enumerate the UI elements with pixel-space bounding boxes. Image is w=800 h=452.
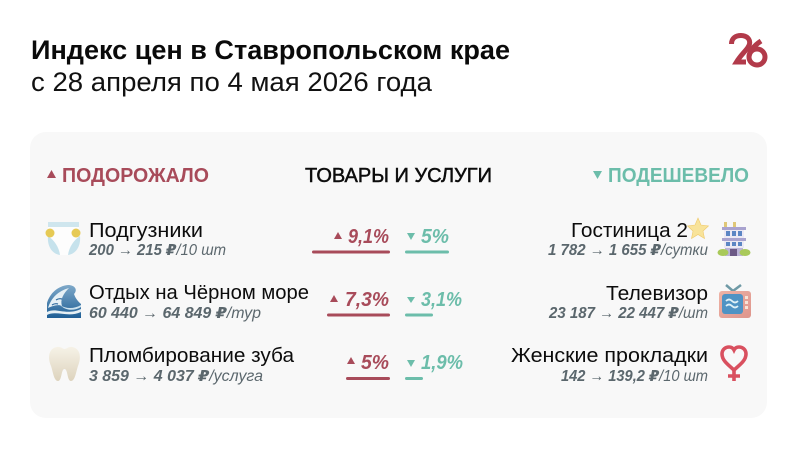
chart: row 2 decrease: 3,1% xyxy=(421,288,462,311)
chart: row 2 increase xyxy=(327,288,390,316)
chart: row 3 decrease: 1,9% xyxy=(421,351,463,374)
chart: row 1 decrease xyxy=(405,225,449,254)
panel: price table xyxy=(30,132,767,418)
row: 2-star hotel xyxy=(548,219,708,259)
row: 2-star hotel: 1 782 → 1 655 ₽/сутки xyxy=(548,242,708,259)
chart: row 1 decrease: 5% xyxy=(421,225,449,248)
row: diapers: 200 → 215 ₽/10 шт xyxy=(88,242,226,259)
row: TV set: Телевизор xyxy=(606,282,708,305)
icon: star xyxy=(688,218,708,238)
heading: goods and services: ТОВАРЫ И УСЛУГИ xyxy=(305,164,492,187)
chart: row 3 increase xyxy=(346,351,390,380)
heading: price decreases: ПОДЕШЕВЕЛО xyxy=(608,164,749,187)
row: dental filling: 3 859 → 4 037 ₽/услуга xyxy=(89,368,263,385)
chart: row 3 increase: 5% xyxy=(361,351,389,374)
row: diapers xyxy=(88,219,226,259)
icon: television xyxy=(719,285,751,318)
chart: row 1 increase: 9,1% xyxy=(348,225,389,248)
row: sanitary pads: 142 → 139,2 ₽/10 шт xyxy=(561,368,708,385)
icon: hotel xyxy=(718,222,750,256)
row: dental filling xyxy=(89,344,295,385)
chart: row 2 increase: 7,3% xyxy=(345,288,389,311)
chart: row 3 decrease xyxy=(405,351,463,380)
subtitle: с 28 апреля по 4 мая 2026 года xyxy=(31,67,432,97)
chart: row 1 increase xyxy=(312,225,390,254)
chart: row 2 decrease xyxy=(405,288,462,316)
heading: price increases: ПОДОРОЖАЛО xyxy=(62,164,209,187)
row: dental filling: Пломбирование зуба xyxy=(89,344,295,367)
row: TV set xyxy=(548,282,708,322)
icon: wave xyxy=(47,285,81,318)
row: Black Sea holiday: 60 440 → 64 849 ₽/тур xyxy=(89,305,261,322)
row: TV set: 23 187 → 22 447 ₽/шт xyxy=(548,305,708,322)
row: Black Sea holiday: Отдых на Чёрном море xyxy=(89,281,309,304)
row: Black Sea holiday xyxy=(89,281,309,322)
row: 2-star hotel: Гостиница 2 xyxy=(571,219,688,242)
row: sanitary pads: Женские прокладки xyxy=(511,344,708,367)
icon: female sign xyxy=(722,347,746,381)
icon: tooth xyxy=(49,347,80,381)
logo: 26 xyxy=(732,36,765,65)
row: diapers: Подгузники xyxy=(89,219,203,242)
icon: diaper xyxy=(46,222,80,255)
title: Индекс цен в Ставропольском крае xyxy=(31,35,510,65)
row: sanitary pads xyxy=(511,344,708,385)
